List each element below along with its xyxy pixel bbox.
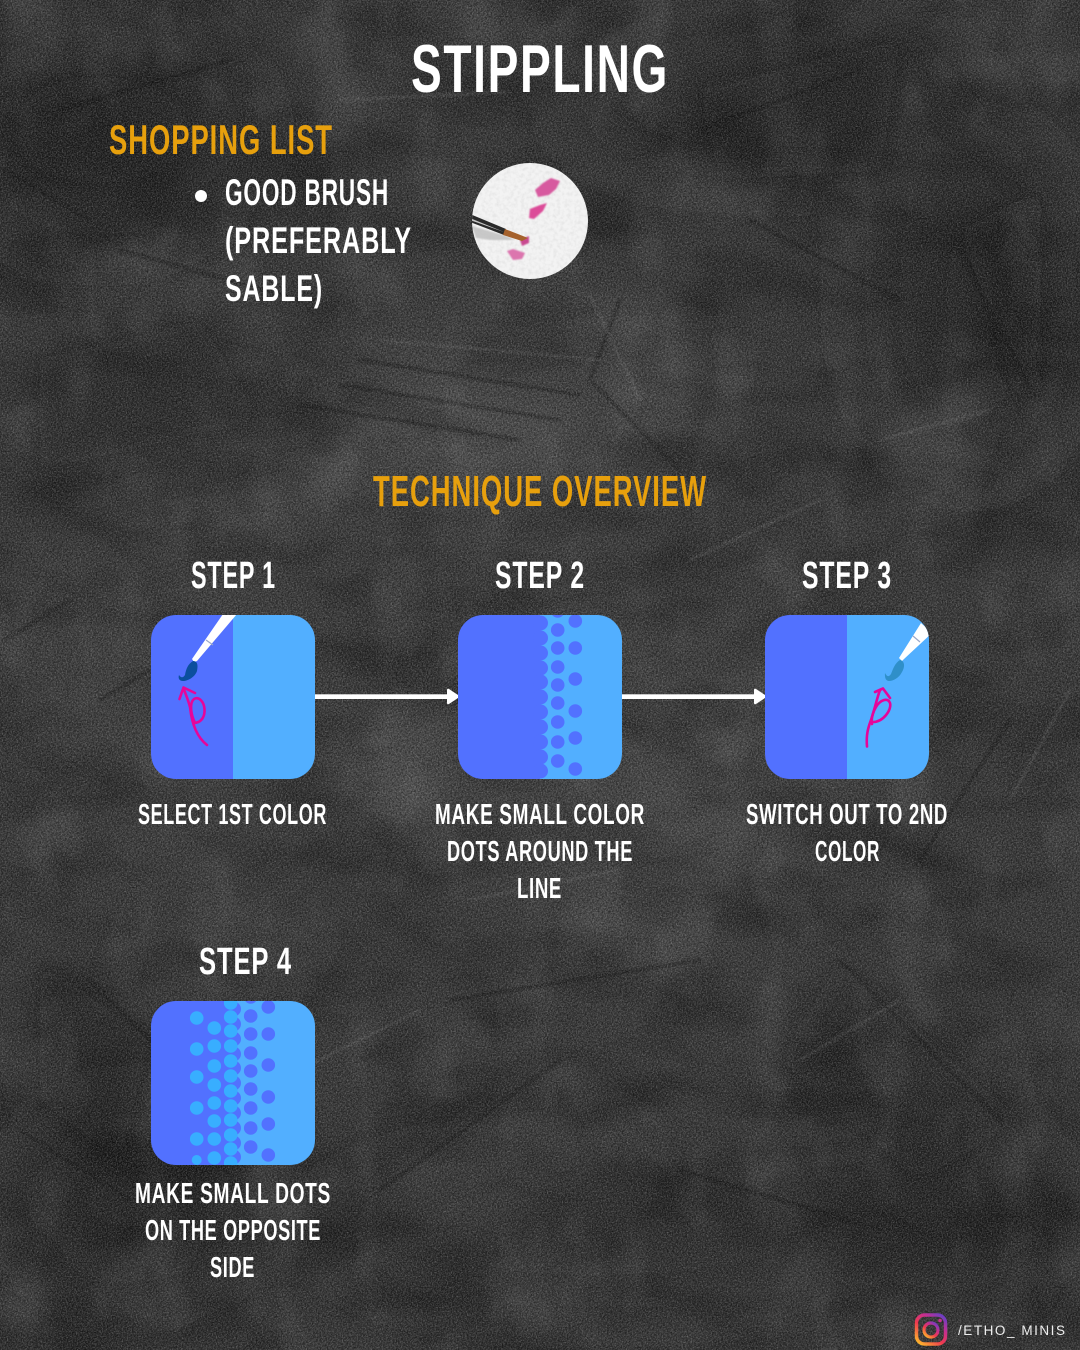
step 4 illustration bbox=[151, 990, 315, 1170]
step 4 caption: MAKE SMALL DOTS bbox=[135, 1178, 331, 1210]
instagram handle: /ETHO_ MINIS bbox=[958, 1323, 1065, 1338]
step 2 illustration bbox=[458, 604, 622, 779]
step 4 caption: ON THE OPPOSITE bbox=[145, 1215, 321, 1247]
step 3 bbox=[746, 555, 948, 868]
step 4 heading: STEP 4 bbox=[199, 941, 292, 983]
step 2 caption: DOTS AROUND THE bbox=[447, 836, 633, 868]
icon: instagram logo bbox=[916, 1315, 946, 1344]
photo: brush stippling on canvas bbox=[470, 161, 590, 281]
step 1 illustration bbox=[151, 614, 315, 779]
step 1 caption: SELECT 1ST COLOR bbox=[138, 799, 327, 831]
heading: technique overview: TECHNIQUE OVERVIEW bbox=[373, 467, 707, 516]
step 2 caption: LINE bbox=[517, 873, 562, 905]
step 3 illustration bbox=[765, 615, 932, 779]
step 1 bbox=[138, 555, 327, 831]
list item text: GOOD BRUSH bbox=[225, 172, 389, 213]
panel: shopping list bbox=[109, 116, 412, 309]
step 3 caption bbox=[746, 799, 948, 868]
arrow: step 2 to step 3 bbox=[622, 689, 766, 704]
step 2 heading: STEP 2 bbox=[495, 555, 585, 597]
step 3 caption: COLOR bbox=[815, 836, 880, 868]
step 2 caption: MAKE SMALL COLOR bbox=[435, 799, 645, 831]
step 1 heading: STEP 1 bbox=[191, 555, 276, 597]
step 2 caption bbox=[435, 799, 645, 905]
step 4 caption bbox=[135, 1178, 331, 1284]
step 3 caption: SWITCH OUT TO 2ND bbox=[746, 799, 948, 831]
list item text: SABLE) bbox=[225, 268, 323, 309]
title: STIPPLING bbox=[411, 31, 669, 107]
heading: shopping list: SHOPPING LIST bbox=[109, 116, 333, 163]
list item text: (PREFERABLY bbox=[225, 220, 412, 261]
bullet bbox=[195, 190, 207, 202]
step 3 heading: STEP 3 bbox=[802, 555, 892, 597]
arrow: step 1 to step 2 bbox=[315, 689, 458, 704]
list item text bbox=[225, 172, 412, 309]
step 4 bbox=[135, 941, 331, 1284]
step 2 bbox=[435, 555, 645, 905]
step 4 caption: SIDE bbox=[210, 1252, 255, 1284]
